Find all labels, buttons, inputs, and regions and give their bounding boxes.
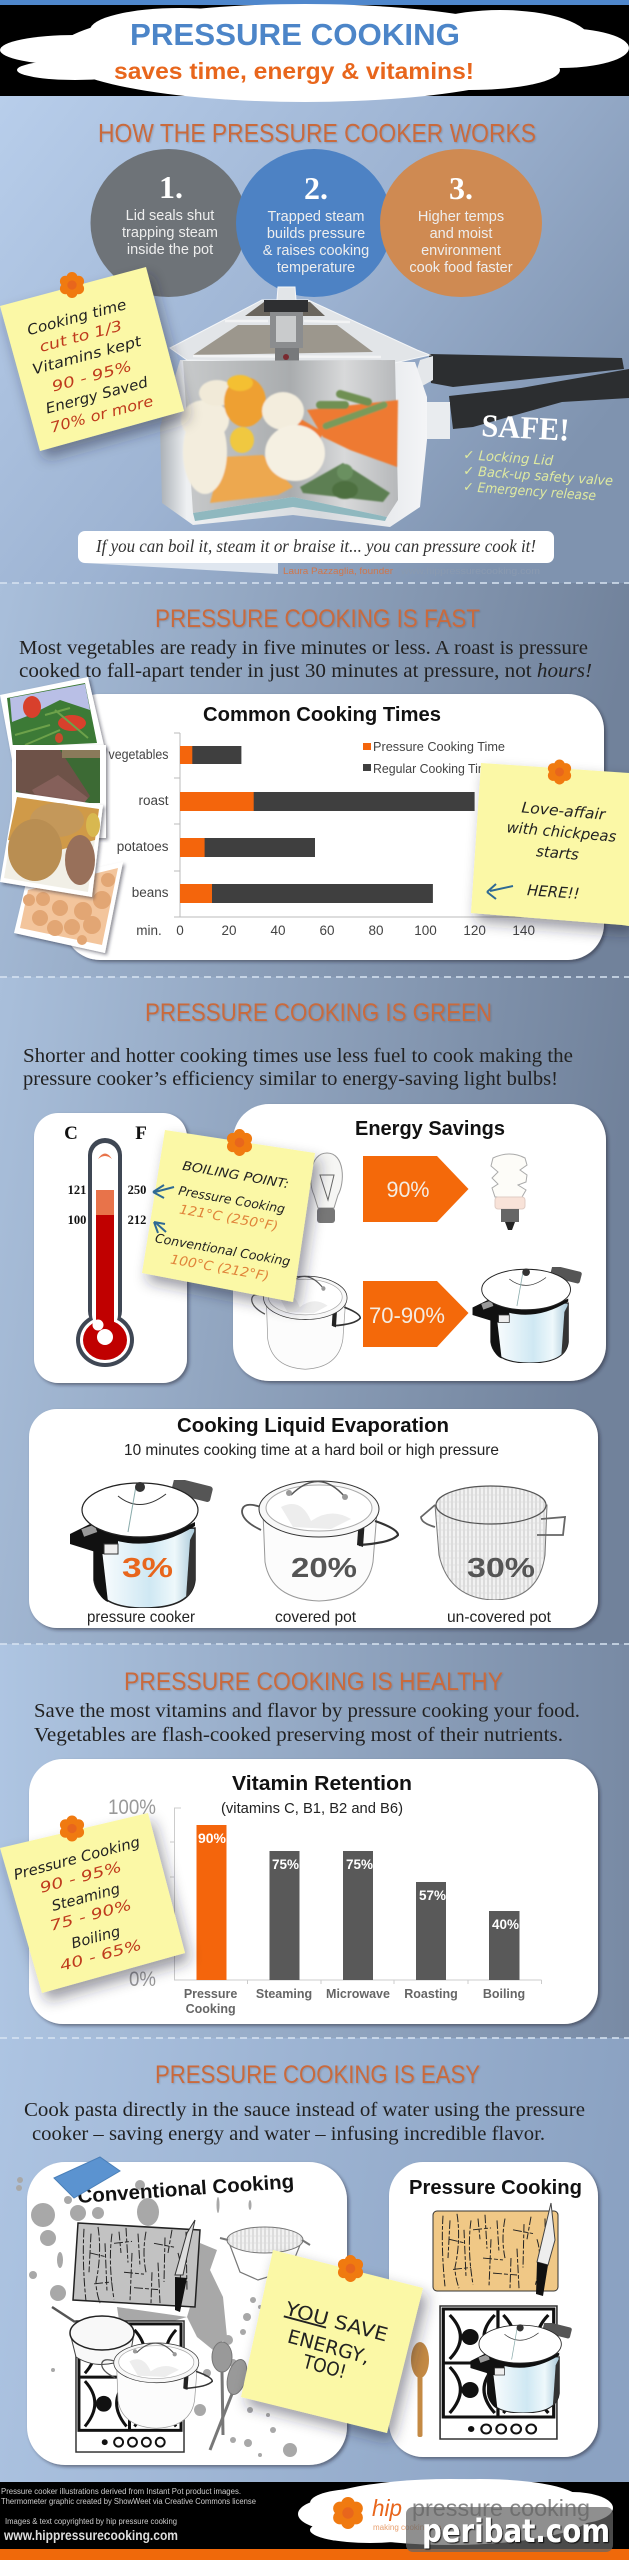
knife <box>536 2203 555 2296</box>
stove <box>440 2306 557 2439</box>
vitamin subtitle: (vitamins C, B1, B2 and B6) <box>221 1800 403 1817</box>
bar chart <box>108 733 535 938</box>
arrow: 90% <box>363 1156 468 1222</box>
text: fast: cooked to fall-apart tender in just 30 minutes at pressure, not hours! <box>19 660 592 682</box>
note: boiling point: BOILING POINT: <box>181 1158 290 1191</box>
roast bar <box>138 792 475 811</box>
panel: conventional cooking <box>16 2157 347 2465</box>
vegetables <box>181 375 398 503</box>
pin <box>227 1129 252 1156</box>
bar: pressure cooking <box>184 1825 237 2016</box>
note: chickpeas: Love-affair <box>521 798 607 824</box>
photo: roast <box>12 745 106 838</box>
x axis labels: 60 <box>319 923 335 938</box>
heading: green: PRESSURE COOKING IS GREEN <box>145 999 492 1027</box>
stove gray <box>76 2321 184 2452</box>
footer cloud <box>298 2479 613 2545</box>
step 1: trapping steam <box>122 225 218 241</box>
text: easy: Cook pasta directly in the sauce instead of water using the pressure <box>24 2099 585 2121</box>
text: easy <box>24 2099 585 2145</box>
step 2: builds pressure <box>267 226 365 242</box>
cutting board tan <box>433 2211 558 2291</box>
scale labels: 100 <box>68 1213 86 1227</box>
icon: pressure cooker <box>473 1265 582 1363</box>
text: green: pressure cooker’s efficiency similar to energy-saving light bulbs! <box>23 1068 558 1090</box>
pin <box>548 760 571 784</box>
colander <box>220 2227 310 2280</box>
subtitle: saves time, energy & vitamins! <box>114 58 474 84</box>
quote box <box>78 531 554 574</box>
icon: sponge <box>54 2157 120 2198</box>
safety list <box>463 407 613 504</box>
note: vitamins: 90 - 95% <box>38 1860 124 1897</box>
note: key stats: Energy Saved <box>44 375 151 417</box>
bar: roasting <box>404 1882 458 2001</box>
note: vitamins: Steaming <box>50 1881 122 1915</box>
text: healthy: Vegetables are flash-cooked preserving most of their nutrients. <box>34 1724 563 1746</box>
spoon <box>411 2342 429 2437</box>
safety list: SAFE! <box>481 407 570 448</box>
handles <box>392 354 629 447</box>
bar: steaming <box>256 1851 312 2001</box>
step 1 <box>90 149 246 297</box>
item: pressure cooker <box>70 1477 213 1626</box>
logo flower <box>333 2497 363 2529</box>
bar: microwave <box>326 1851 390 2001</box>
attribution: www.hippressurecooking.com <box>400 566 540 577</box>
potatoes bar: potatoes <box>117 839 169 854</box>
safety list: ✓ Emergency release <box>463 479 597 504</box>
bar: microwave: Microwave <box>326 1987 390 2001</box>
item: uncovered pot: 30% <box>467 1552 535 1583</box>
logo text <box>372 2495 590 2532</box>
heading: fast: PRESSURE COOKING IS FAST <box>155 605 480 633</box>
step 2: & raises cooking <box>263 243 369 259</box>
step 3: cook food faster <box>409 260 513 276</box>
credits <box>1 2487 257 2543</box>
scale labels <box>64 1123 147 1227</box>
arrow: 70-90%: 70-90% <box>369 1303 445 1328</box>
credits: www.hippressurecooking.com <box>3 2527 178 2543</box>
evaporation title: Cooking Liquid Evaporation <box>177 1415 449 1437</box>
heading: how it works: HOW THE PRESSURE COOKER WORKS <box>98 118 536 148</box>
bar: boiling <box>483 1911 525 2001</box>
note: boiling point: Conventional Cooking <box>154 1230 292 1269</box>
step 2 <box>236 149 392 297</box>
arrow: 90%: 90% <box>386 1177 430 1202</box>
x axis labels: 120 <box>463 923 486 938</box>
note: key stats: cut to 1/3 <box>38 318 124 356</box>
icon: stock pot <box>252 1276 360 1369</box>
step circles <box>90 149 542 297</box>
icon: incandescent bulb <box>311 1153 342 1223</box>
cutting board gray <box>73 2223 200 2307</box>
bar: roasting: 57% <box>419 1887 447 1903</box>
note: chickpeas: starts <box>535 842 580 864</box>
text: green: Shorter and hotter cooking times use less fuel to cook making the <box>23 1045 573 1067</box>
conventional title: Conventional Cooking <box>77 2171 295 2208</box>
step 3: environment <box>421 243 501 259</box>
note: key stats: 70% or more <box>49 394 155 437</box>
note: chickpeas <box>471 760 629 926</box>
scale labels: 250 <box>128 1183 146 1197</box>
note: you save energy <box>241 2250 423 2433</box>
item: pressure cooker: pressure cooker <box>87 1609 196 1626</box>
legend: Pressure Cooking Time <box>373 739 505 754</box>
item: pressure cooker: 3% <box>122 1552 173 1583</box>
beans bar <box>132 884 433 903</box>
step 2: 2. <box>304 170 328 206</box>
x axis labels: 0 <box>176 923 184 938</box>
note: you save energy: TOO! <box>300 2351 349 2384</box>
panel: liquid evaporation <box>29 1409 598 1628</box>
step 1: 1. <box>159 169 183 205</box>
pressure cooker cutaway <box>160 287 629 527</box>
panel: pressure cooking <box>389 2162 598 2457</box>
bar: steaming: Steaming <box>256 1987 312 2001</box>
title: PRESSURE COOKING <box>130 17 460 52</box>
footer band <box>0 2479 629 2560</box>
note: vitamins: 75 - 90% <box>48 1898 134 1935</box>
scale labels: C <box>64 1123 78 1144</box>
x axis labels: 20 <box>221 923 237 938</box>
note: chickpeas: HERE!! <box>526 881 580 903</box>
item: covered pot <box>242 1481 398 1626</box>
note: vitamins: 40 - 65% <box>58 1938 144 1975</box>
text: healthy: Save the most vitamins and flavor by pressure cooking your food. <box>34 1700 580 1722</box>
note: boiling point: 100°C (212°F) <box>169 1252 270 1285</box>
step 1: Lid seals shut <box>126 208 214 224</box>
x axis labels: 40 <box>270 923 286 938</box>
pressure title: Pressure Cooking <box>409 2177 582 2199</box>
scale labels: F <box>135 1123 147 1144</box>
item: uncovered pot: un-covered pot <box>447 1609 552 1626</box>
bar chart: 100% <box>108 1796 156 1819</box>
text: fast: Most vegetables are ready in five minutes or less. A roast is pressure <box>19 637 588 659</box>
header band <box>0 0 629 102</box>
safety list: ✓ Locking Lid <box>463 447 554 469</box>
credits: Thermometer graphic created by ShowWeet via Creative Commons license <box>1 2497 257 2506</box>
note: boiling point: Pressure Cooking <box>177 1183 286 1216</box>
text: healthy <box>34 1700 580 1746</box>
photo: chickpeas <box>14 862 123 953</box>
splatter <box>16 2177 297 2457</box>
note: boiling point: 121°C (250°F) <box>178 1202 279 1235</box>
energy title: Energy Savings <box>355 1118 505 1140</box>
note: vitamins: Boiling <box>70 1924 122 1952</box>
vegetables bar: vegetables <box>108 747 169 762</box>
beans bar: beans <box>132 885 169 900</box>
photo: green beans <box>0 677 105 760</box>
bar: pressure cooking: Cooking <box>186 2002 236 2016</box>
legend: Regular Cooking Time <box>373 761 495 776</box>
quote box: If you can boil it, steam it or braise it... you can pressure cook it! <box>95 536 536 556</box>
note: vitamins: Pressure Cooking <box>12 1835 142 1884</box>
x axis labels: min. <box>136 923 162 938</box>
note: key stats: Cooking time <box>26 297 128 339</box>
evaporation subtitle: 10 minutes cooking time at a hard boil or high pressure <box>124 1442 499 1459</box>
scale labels: 121 <box>68 1183 86 1197</box>
knife gray <box>175 2220 195 2312</box>
panel: vitamin retention <box>29 1759 598 2024</box>
icon: cfl bulb <box>491 1154 527 1230</box>
note: chickpeas: with chickpeas <box>506 818 617 846</box>
note: key stats: 90 - 95% <box>50 359 134 395</box>
heading: easy: PRESSURE COOKING IS EASY <box>155 2061 480 2089</box>
step 2: temperature <box>277 260 355 276</box>
bar: boiling: Boiling <box>483 1987 525 2001</box>
text: fast <box>19 637 592 682</box>
vitamin title: Vitamin Retention <box>232 1773 412 1795</box>
large pot <box>102 2343 212 2428</box>
note: key stats <box>0 267 184 451</box>
pin <box>338 2255 363 2282</box>
step 3: and moist <box>430 226 492 242</box>
note: you save energy: ENERGY, <box>285 2326 372 2369</box>
x axis labels: 140 <box>512 923 535 938</box>
panel: common cooking times <box>64 694 604 960</box>
bar chart: 0% <box>129 1968 156 1991</box>
step 3: 3. <box>449 170 473 206</box>
photo: potatoes <box>0 792 103 897</box>
item: covered pot: covered pot <box>275 1609 357 1626</box>
panel: thermometer <box>34 1113 187 1383</box>
arrow: 70-90% <box>363 1281 468 1347</box>
pin <box>60 272 84 298</box>
lid <box>170 287 430 364</box>
credits: Images & text copyrighted by hip pressure cooking <box>5 2517 177 2526</box>
x axis labels: 80 <box>368 923 384 938</box>
chart title: Common Cooking Times <box>203 704 441 726</box>
x axis labels <box>136 923 535 938</box>
step 3: Higher temps <box>418 209 504 225</box>
x axis labels: 100 <box>414 923 437 938</box>
step 2: Trapped steam <box>268 209 364 225</box>
pressure cooker <box>470 2321 572 2413</box>
note: you save energy: YOU SAVE <box>282 2298 390 2346</box>
step 3 <box>380 149 542 297</box>
cloud banner <box>0 4 629 102</box>
bar chart <box>108 1796 542 2016</box>
thermometer graphic <box>76 1138 134 1367</box>
arrow <box>487 884 513 899</box>
safety list: ✓ Back-up safety valve <box>463 463 613 489</box>
logo text: pressure cooking <box>412 2495 590 2521</box>
arrows <box>153 1185 174 1233</box>
bar: boiling: 40% <box>492 1916 520 1932</box>
attribution: Laura Pazzaglia, founder <box>283 566 393 577</box>
text: green <box>23 1045 573 1090</box>
step 1: inside the pot <box>127 242 213 258</box>
bar: microwave: 75% <box>346 1856 374 1872</box>
bar: roasting: Roasting <box>404 1987 458 2001</box>
text: easy: cooker – saving energy and water – infusing incredible flavor. <box>32 2123 545 2145</box>
logo text: making cooking hip <box>373 2523 442 2532</box>
food photos <box>0 677 123 953</box>
note: boiling point <box>142 1129 315 1302</box>
panel: energy savings <box>233 1104 606 1381</box>
potatoes bar <box>117 838 315 857</box>
interior <box>183 360 398 517</box>
note: key stats: Vitamins kept <box>31 334 145 378</box>
small pot <box>52 2307 134 2364</box>
spoons <box>210 2342 250 2450</box>
bar: pressure cooking: Pressure <box>184 1987 237 2001</box>
pin <box>60 1816 84 1842</box>
bar: pressure cooking: 90% <box>198 1830 227 1846</box>
legend <box>363 739 505 776</box>
logo text: hip <box>372 2495 402 2521</box>
credits: Pressure cooker illustrations derived from Instant Pot product images. <box>1 2487 241 2496</box>
heading: healthy: PRESSURE COOKING IS HEALTHY <box>124 1668 503 1696</box>
scale labels: 212 <box>128 1213 146 1227</box>
roast bar: roast <box>138 793 169 808</box>
item: uncovered pot <box>421 1486 565 1626</box>
attribution <box>283 566 540 577</box>
item: covered pot: 20% <box>291 1552 357 1583</box>
vegetables bar <box>108 746 241 764</box>
body <box>160 360 427 527</box>
bar: steaming: 75% <box>272 1856 300 1872</box>
note: vitamins <box>0 1813 185 1993</box>
